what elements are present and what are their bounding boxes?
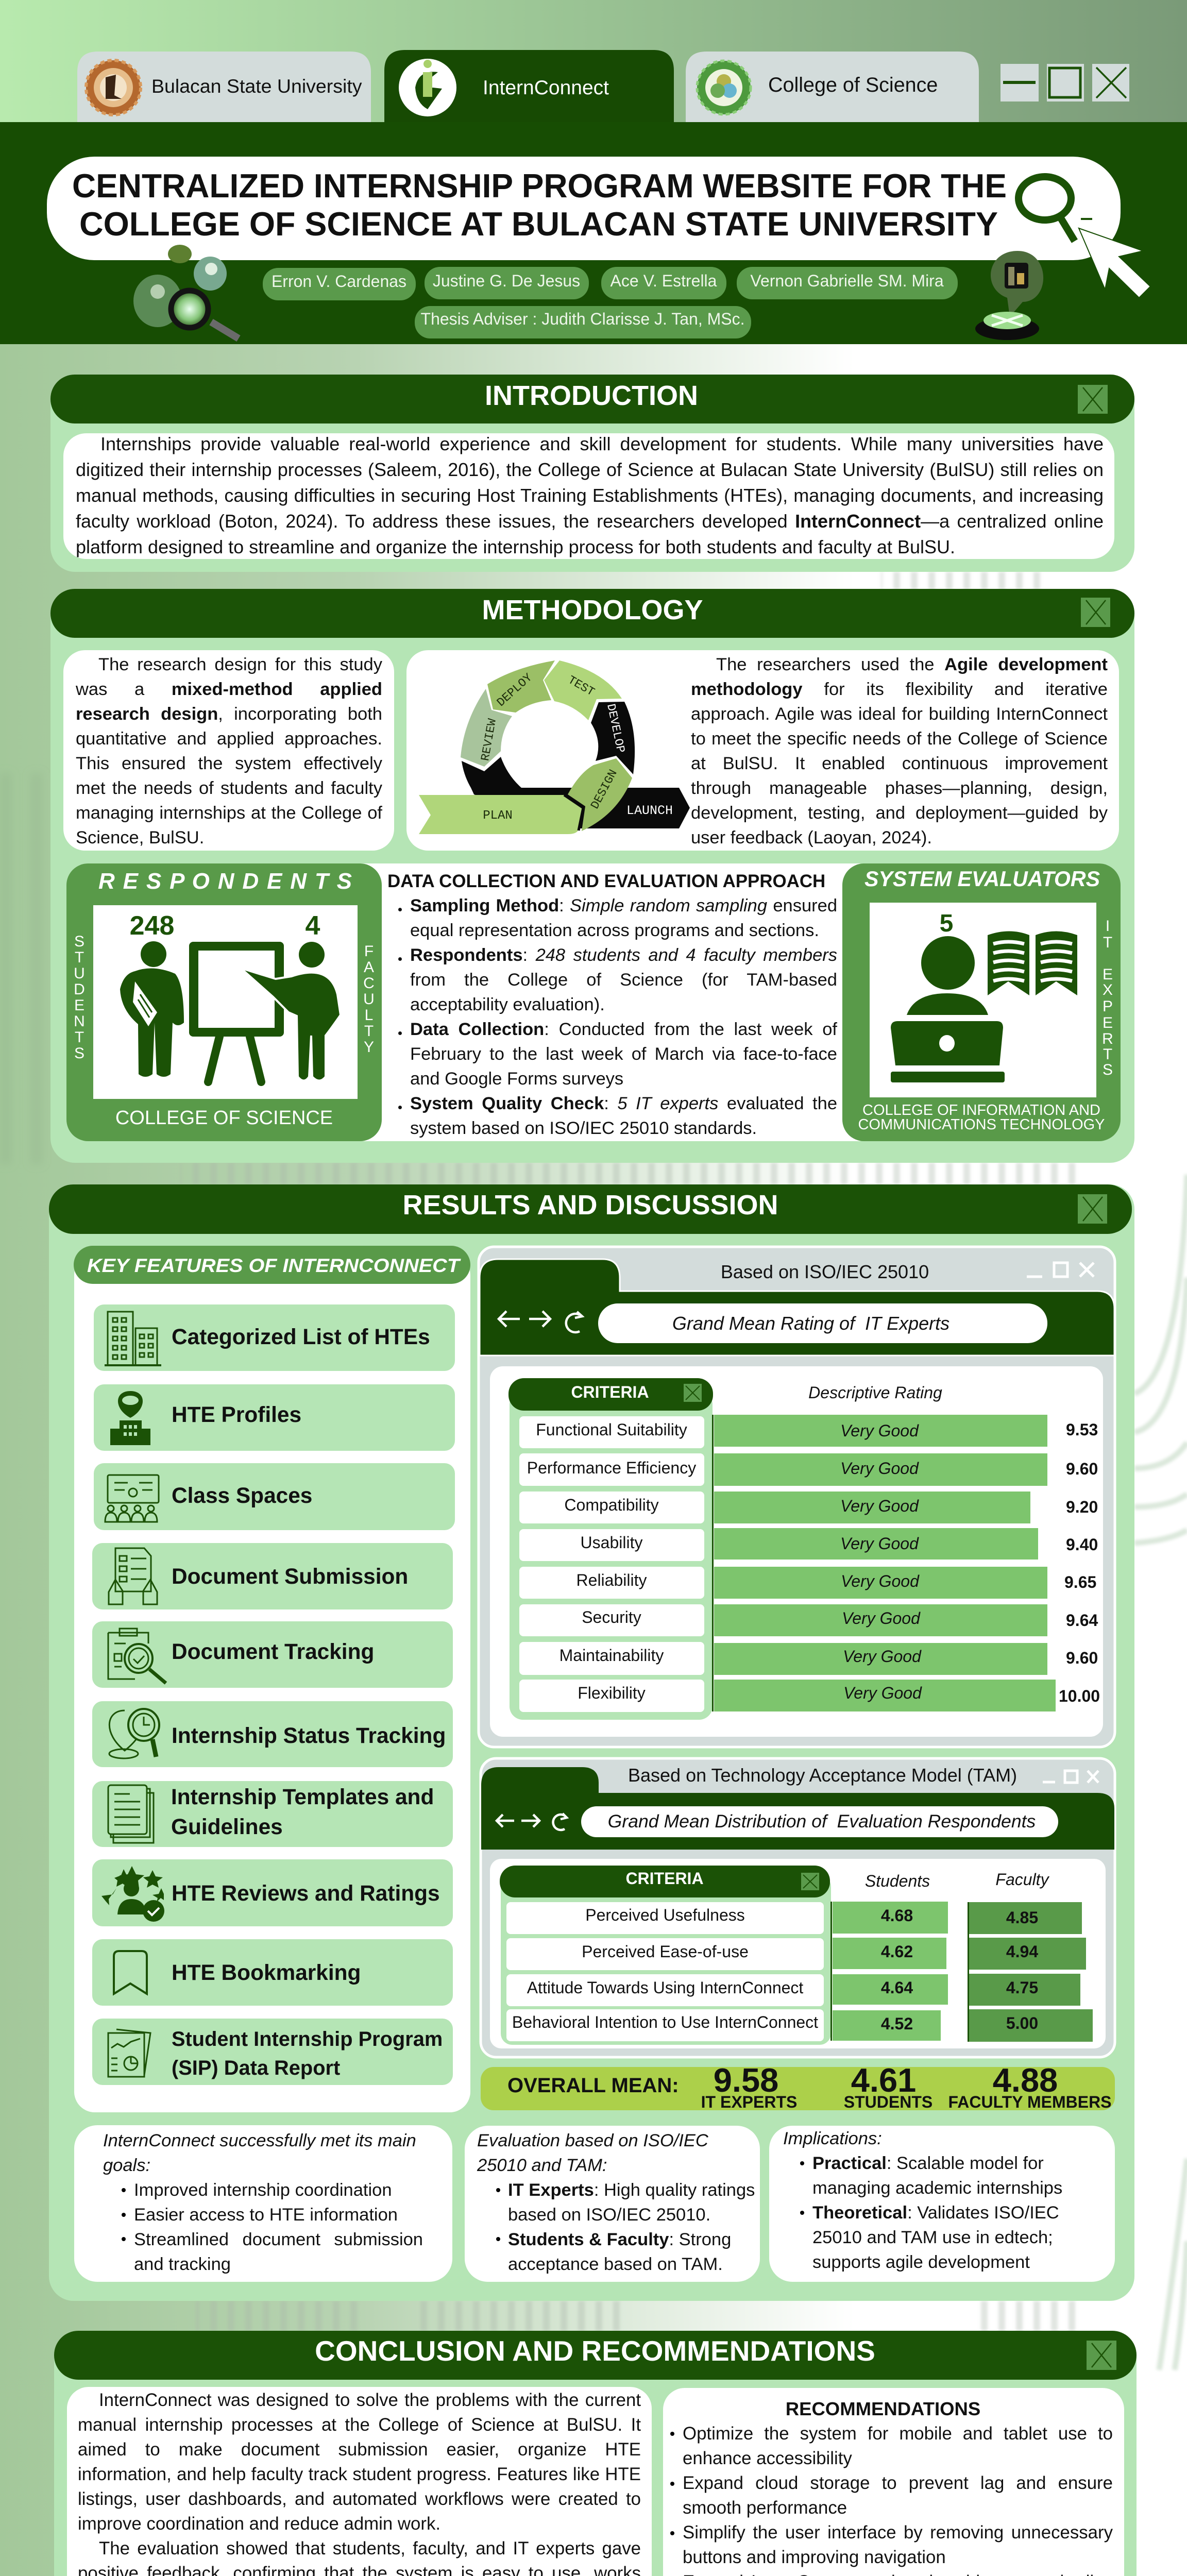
address bar <box>598 1303 1047 1343</box>
author names: Ace V. Estrella <box>611 272 717 290</box>
panel: key features: HTE Reviews and Ratings <box>172 1881 440 1905</box>
label: IT EXPERTS vertical: E <box>1103 1014 1113 1031</box>
bar chart: ratings: 9.60 <box>1066 1460 1098 1478</box>
panel: key features: HTE Bookmarking <box>172 1960 361 1985</box>
label: FACULTY vertical: L <box>365 1007 373 1024</box>
panel: system evaluators <box>842 863 1121 1141</box>
panel: results and discussion <box>49 1184 1134 2301</box>
browser tab: InternConnect <box>384 50 674 122</box>
criteria column: Usability <box>581 1533 642 1552</box>
bar chart: ratings: 9.40 <box>1066 1535 1098 1554</box>
criteria column: Behavioral Intention to Use InternConnect <box>512 2013 818 2031</box>
panel: introduction <box>50 375 1134 572</box>
browser window: ISO/IEC 25010 chart: Grand Mean Rating of IT Experts <box>672 1313 949 1334</box>
bar chart: ratings: 9.60 <box>1066 1649 1098 1667</box>
title banner <box>47 157 1121 260</box>
heading: introduction: INTRODUCTION <box>485 380 698 411</box>
text block: implications <box>783 2129 1062 2272</box>
overall mean strip: 9.58 <box>714 2061 778 2099</box>
overall mean strip: 4.88 <box>993 2061 1058 2099</box>
title banner: CENTRALIZED INTERNSHIP PROGRAM WEBSITE FOR THE <box>72 167 1007 205</box>
label: FACULTY vertical: A <box>364 959 374 976</box>
author names: Vernon Gabrielle SM. Mira <box>750 272 944 290</box>
panel: key features: (SIP) Data Report <box>172 2057 340 2079</box>
header band <box>0 122 1187 344</box>
bar chart: ratings: 10.00 <box>1059 1687 1100 1705</box>
criteria column: Security <box>582 1608 641 1626</box>
panel: system evaluators: 5 <box>940 910 953 937</box>
criteria column: Performance Efficiency <box>527 1459 696 1477</box>
bar chart: ratings: 9.64 <box>1066 1611 1098 1630</box>
text block: data collection bullets: System Quality Check: 5 IT experts evaluated the <box>410 1094 837 1113</box>
icon: class space <box>105 1475 159 1522</box>
bar chart: ratings <box>712 1415 1100 1711</box>
icon: expert at laptop <box>891 936 1005 1082</box>
bar chart: ratings: Very Good <box>842 1609 921 1628</box>
address bar <box>581 1806 1058 1837</box>
label: IT EXPERTS vertical: I <box>1106 918 1110 935</box>
text block: implications: supports agile development <box>812 2252 1030 2272</box>
criteria column: Perceived Usefulness <box>585 1906 745 1924</box>
heading: data collection: DATA COLLECTION AND EVALUATION APPROACH <box>387 871 825 891</box>
label: IT EXPERTS vertical: T <box>1103 1046 1112 1063</box>
panel: key features: KEY FEATURES OF INTERNCONNECT <box>87 1255 462 1276</box>
bar chart: ratings: Very Good <box>843 1684 922 1702</box>
text block: conclusion: manual internship processes at the College of Science at BulSU. It <box>78 2415 641 2435</box>
text block: data collection bullets: and Google Forms surveys <box>410 1069 623 1089</box>
text block: agile methodology: through manageable phases—planning, design, <box>691 778 1108 798</box>
window controls <box>1043 1771 1098 1783</box>
panel: key features: Internship Status Tracking <box>172 1723 446 1748</box>
bar chart: faculty: 4.75 <box>1006 1978 1038 1997</box>
criteria column: Attitude Towards Using InternConnect <box>527 1978 803 1997</box>
icon: navigation arrows <box>499 1311 582 1332</box>
bar chart: students <box>830 1872 948 2041</box>
icon: magnifier and cursor <box>1019 177 1150 298</box>
icon: templates <box>108 1785 154 1843</box>
text block: agile methodology: to meet the specific needs of the College of Science <box>691 729 1108 749</box>
panel: evaluation card <box>465 2126 760 2282</box>
overall mean strip: OVERALL MEAN: <box>507 2074 679 2097</box>
panel: key features: Student Internship Program <box>172 2028 443 2050</box>
text block: conclusion: InternConnect was designed to solve the problems with the current <box>99 2390 641 2410</box>
text block: research design: was a mixed-method applied <box>76 680 382 699</box>
text block: goals: goals: <box>103 2156 150 2175</box>
criteria column <box>500 1866 831 2045</box>
agile development cycle diagram: REVIEW <box>479 718 499 762</box>
text block: research design: Science, BulSU. <box>76 828 204 848</box>
text block: implications: 25010 and TAM use in edtech; <box>812 2228 1053 2247</box>
browser tab: Bulacan State University <box>77 52 371 122</box>
text block: data collection bullets: Respondents: 248 students and 4 faculty members <box>410 945 837 965</box>
overall mean strip: STUDENTS <box>844 2093 932 2111</box>
bar chart: students: 4.62 <box>881 1942 913 1961</box>
text block: conclusion <box>78 2390 641 2576</box>
text block: introduction <box>76 433 1104 557</box>
text block: goals: Streamlined document submission <box>134 2230 423 2249</box>
title banner: COLLEGE OF SCIENCE AT BULACAN STATE UNIVERSITY <box>79 205 998 243</box>
label: STUDENTS vertical: T <box>75 1029 84 1046</box>
text block: data collection bullets: Sampling Method: Simple random sampling ensured <box>410 896 837 916</box>
icon: college seal <box>697 61 751 114</box>
text block: goals: Easier access to HTE information <box>134 2205 398 2225</box>
text block: conclusion: listings, user dashboards, and automated workflows were created to <box>78 2489 641 2509</box>
browser window: TAM chart <box>481 1758 1115 2057</box>
icon: location building <box>110 1391 150 1445</box>
text block: research design: managing internships at the College of <box>76 803 382 823</box>
text block: recommendations: buttons and improving navigation <box>683 2547 946 2567</box>
bar chart: faculty: Faculty <box>995 1870 1050 1889</box>
bar chart: ratings: Very Good <box>843 1647 922 1666</box>
text block: conclusion: aimed to make document submission easier, organize HTE <box>78 2439 641 2460</box>
text block: introduction: platform designed to streamline and organize the internship process for both students and faculty at BulSU. <box>76 536 955 557</box>
text block: agile methodology: at BulSU. It enabled continuous improvement <box>691 754 1108 773</box>
bar chart: faculty <box>968 1870 1093 2042</box>
panel: key features: HTE Profiles <box>172 1402 301 1427</box>
bar chart: faculty: 4.94 <box>1006 1942 1038 1961</box>
text block: introduction: Internships provide valuable real-world experience and skill development for students. While many universities have <box>100 433 1104 454</box>
label: IT EXPERTS vertical: S <box>1103 1061 1113 1078</box>
text block: research design: This ensured the system effectively <box>76 754 382 773</box>
panel: respondents: 248 <box>130 911 174 941</box>
text block: agile methodology: methodology for its flexibility and iterative <box>691 680 1108 699</box>
icon: buildings <box>105 1312 161 1365</box>
text block: recommendations: Optimize the system for mobile and tablet use to <box>683 2424 1113 2444</box>
text block: recommendations <box>683 2424 1113 2576</box>
icon: reviews and ratings <box>101 1866 164 1922</box>
icon: chat bubble document <box>975 251 1043 340</box>
text block: evaluation: based on ISO/IEC 25010. <box>508 2205 710 2225</box>
bar chart: students: 4.64 <box>881 1978 913 1997</box>
label: STUDENTS vertical: U <box>74 965 85 982</box>
text block: recommendations: Expand cloud storage to prevent lag and ensure <box>683 2473 1113 2493</box>
bar chart: faculty: 4.85 <box>1006 1908 1038 1927</box>
agile development cycle diagram: DESIGN <box>588 768 620 811</box>
icon: bookmark <box>114 1951 147 1994</box>
overall mean strip: FACULTY MEMBERS <box>948 2093 1112 2111</box>
text block: goals: InternConnect successfully met its main <box>103 2131 416 2150</box>
panel: key features: Class Spaces <box>172 1483 312 1507</box>
text block: agile methodology: development, testing, and deployment—guided by <box>691 803 1108 823</box>
text block: implications: Theoretical: Validates ISO/IEC <box>812 2203 1059 2223</box>
text block: data collection bullets: system based on ISO/IEC 25010 standards. <box>410 1118 757 1138</box>
panel: respondents: R E S P O N D E N T S <box>98 869 352 894</box>
text block: evaluation <box>477 2131 755 2274</box>
agile development cycle diagram: DEVELOP <box>604 703 628 754</box>
panel: goals card <box>74 2125 452 2282</box>
bar chart: ratings: Very Good <box>840 1459 919 1478</box>
text block: evaluation: IT Experts: High quality ratings <box>508 2180 755 2200</box>
text block: introduction: digitized their internship processes (Saleem, 2016), the College of Science at Bulacan State University (BulSU) still relies on <box>76 459 1104 480</box>
label: STUDENTS vertical: N <box>74 1013 85 1030</box>
panel: implications card <box>769 2126 1115 2282</box>
heading: methodology: METHODOLOGY <box>482 595 703 625</box>
panel: methodology <box>50 589 1134 1163</box>
text block: research design: The research design for this study <box>98 655 382 674</box>
bar chart: ratings: Very Good <box>840 1534 919 1553</box>
heading: introduction <box>50 375 1134 423</box>
text block: agile methodology: approach. Agile was ideal for building InternConnect <box>691 704 1108 724</box>
author names: Thesis Adviser : Judith Clarisse J. Tan, MSc. <box>421 310 744 328</box>
text block: recommendations: enhance accessibility <box>683 2448 852 2468</box>
text block: agile methodology: The researchers used the Agile development <box>716 655 1108 674</box>
criteria column: Flexibility <box>578 1684 646 1702</box>
browser tab: InternConnect: InternConnect <box>483 77 609 99</box>
text block: implications: Practical: Scalable model for <box>812 2154 1044 2173</box>
text block: recommendations: smooth performance <box>683 2498 847 2518</box>
text block: conclusion: The evaluation showed that students, faculty, and IT experts gave <box>99 2538 641 2558</box>
agile development cycle diagram <box>419 660 690 834</box>
agile development cycle diagram: PLAN <box>483 809 513 823</box>
text block: data collection bullets <box>398 896 837 1138</box>
overall mean strip: 4.61 <box>851 2061 916 2099</box>
panel: respondents <box>66 863 382 1141</box>
text block: introduction: manual methods, causing difficulties in securing Host Training Establishments (HTEs), managing documents, and increasing <box>76 485 1104 506</box>
text block: recommendations: Simplify the user interface by removing unnecessary <box>683 2522 1113 2543</box>
text block: goals <box>103 2131 423 2274</box>
icon: document tracking <box>108 1629 166 1683</box>
text block: research design: research design, incorporating both <box>76 704 382 724</box>
text block: research design <box>76 655 382 848</box>
bar chart: ratings: Very Good <box>840 1497 919 1515</box>
overall mean strip <box>481 2061 1115 2111</box>
bar chart: students: 4.52 <box>881 2014 913 2033</box>
text block: evaluation: 25010 and TAM: <box>477 2156 607 2175</box>
text block: implications: managing academic internships <box>812 2178 1062 2198</box>
panel: system evaluators: SYSTEM EVALUATORS <box>864 867 1100 891</box>
label: STUDENTS vertical: E <box>74 997 84 1014</box>
bar chart: students: Students <box>865 1872 930 1890</box>
criteria column: CRITERIA <box>625 1869 704 1888</box>
text block: agile methodology: user feedback (Laoyan, 2024). <box>691 828 932 848</box>
agile development cycle diagram: LAUNCH <box>626 803 673 818</box>
text block: evaluation: Evaluation based on ISO/IEC <box>477 2131 708 2150</box>
label: FACULTY vertical: C <box>363 975 375 992</box>
agile development cycle diagram: DEPLOY <box>495 671 535 709</box>
panel: system evaluators: COLLEGE OF INFORMATION AND <box>862 1102 1100 1118</box>
panel: conclusion and recommendations: RECOMMENDATIONS <box>786 2398 980 2419</box>
label: IT EXPERTS vertical: P <box>1103 998 1113 1015</box>
text block: data collection bullets: Data Collection: Conducted from the last week of <box>410 1020 837 1039</box>
criteria column: Functional Suitability <box>536 1420 687 1439</box>
bar chart: ratings: 9.20 <box>1066 1498 1098 1516</box>
text block: research design: quantitative and applied approaches. <box>76 729 382 749</box>
bar chart: ratings: 9.65 <box>1064 1573 1096 1591</box>
author names <box>263 267 958 338</box>
panel: key features: Guidelines <box>171 1815 283 1839</box>
browser window: ISO/IEC 25010 chart: Descriptive Rating <box>808 1383 942 1402</box>
label: FACULTY vertical: F <box>364 943 374 960</box>
data collection backing <box>361 863 860 1141</box>
label: IT EXPERTS vertical: X <box>1103 981 1113 998</box>
panel: conclusion and recommendations <box>54 2331 1137 2576</box>
icon: presentation board <box>189 942 284 1082</box>
icon: university seal <box>86 60 141 115</box>
icon: navigation arrows <box>497 1814 567 1830</box>
bar chart: faculty: 5.00 <box>1006 2014 1038 2032</box>
icon: InternConnect logo <box>399 59 456 116</box>
window controls <box>1027 1263 1094 1277</box>
overall mean strip: IT EXPERTS <box>701 2093 797 2111</box>
text block: evaluation: Students & Faculty: Strong <box>508 2230 731 2249</box>
label: STUDENTS vertical: S <box>74 1045 84 1062</box>
label: FACULTY vertical: Y <box>364 1039 374 1056</box>
browser window: ISO/IEC 25010 chart: Based on ISO/IEC 25010 <box>721 1261 929 1282</box>
window controls <box>1001 64 1129 101</box>
heading: conclusion <box>54 2331 1137 2380</box>
label: IT EXPERTS vertical: T <box>1103 934 1112 951</box>
label: IT EXPERTS vertical: E <box>1103 966 1113 983</box>
icon: student figure <box>120 941 184 1077</box>
text block: research design: met the needs of students and faculty <box>76 778 382 798</box>
text block: introduction: faculty workload (Boton, 2024). To address these issues, the researchers developed InternConnect—a centralized online <box>76 511 1104 532</box>
text block: conclusion: information, and help faculty track student progress. Features like HTE <box>78 2464 641 2484</box>
browser window: TAM chart: Grand Mean Distribution of Evaluation Respondents <box>608 1811 1036 1832</box>
icon: faculty figure <box>241 942 341 1081</box>
text block: data collection bullets: February to the last week of March via face-to-face <box>410 1044 837 1064</box>
browser window: TAM chart: Based on Technology Acceptance Model (TAM) <box>628 1765 1017 1786</box>
text block: implications: Implications: <box>783 2129 882 2148</box>
label: STUDENTS vertical: S <box>74 933 84 950</box>
agile development cycle diagram: TEST <box>566 673 597 699</box>
icon: internship status <box>109 1709 159 1758</box>
panel: respondents: 4 <box>306 911 320 941</box>
bar chart: students: 4.68 <box>881 1906 913 1925</box>
panel: key features: Categorized List of HTEs <box>172 1325 430 1349</box>
text block: evaluation: acceptance based on TAM. <box>508 2255 723 2274</box>
icon: open book <box>988 931 1077 995</box>
heading: results and discussion <box>49 1184 1132 1234</box>
panel: respondents: COLLEGE OF SCIENCE <box>115 1107 333 1129</box>
panel: key features: Internship Templates and <box>171 1785 434 1809</box>
label: FACULTY vertical: U <box>363 991 375 1008</box>
text block: data collection bullets: equal representation across programs and sections. <box>410 921 819 940</box>
bar chart: ratings: 9.53 <box>1066 1420 1098 1439</box>
text block: agile methodology <box>691 655 1108 848</box>
panel: key features: Document Submission <box>172 1564 408 1588</box>
author names: Erron V. Cardenas <box>272 272 406 291</box>
panel: system evaluators: COMMUNICATIONS TECHNOLOGY <box>858 1116 1105 1133</box>
label: STUDENTS vertical: D <box>74 981 85 998</box>
bar chart: ratings: Very Good <box>841 1572 920 1590</box>
text block: goals: Improved internship coordination <box>134 2180 392 2200</box>
criteria column <box>508 1378 713 1720</box>
criteria column: Reliability <box>576 1571 647 1589</box>
browser tab: College of Science <box>686 52 979 122</box>
panel: key features <box>74 1246 470 2112</box>
browser tab: College of Science: College of Science <box>768 74 938 96</box>
icon: document submission <box>109 1548 157 1604</box>
label: FACULTY vertical: T <box>364 1023 374 1040</box>
criteria column: CRITERIA <box>571 1383 649 1401</box>
icon: data report <box>108 2029 150 2077</box>
browser window: ISO/IEC 25010 chart <box>479 1247 1115 1747</box>
text block: conclusion: improve coordination and reduce admin work. <box>78 2514 440 2534</box>
browser tab: Bulacan State University: Bulacan State University <box>151 75 362 97</box>
author names: Justine G. De Jesus <box>433 272 580 290</box>
bar chart: ratings: Very Good <box>840 1421 919 1440</box>
heading: methodology <box>50 589 1134 638</box>
criteria column: Maintainability <box>559 1646 664 1665</box>
text block: data collection bullets: from the College of Science (for TAM-based <box>410 970 837 990</box>
criteria column: Perceived Ease-of-use <box>582 1942 749 1961</box>
icon: people search <box>133 245 239 338</box>
label: STUDENTS vertical: T <box>75 949 84 966</box>
text block: data collection bullets: acceptability evaluation). <box>410 995 605 1014</box>
heading: conclusion: CONCLUSION AND RECOMMENDATIONS <box>315 2335 875 2367</box>
criteria column: Compatibility <box>564 1496 659 1514</box>
panel: key features: Document Tracking <box>172 1639 374 1664</box>
label: IT EXPERTS vertical: R <box>1102 1030 1113 1047</box>
text block: goals: and tracking <box>134 2255 231 2274</box>
heading: results and discussion: RESULTS AND DISCUSSION <box>402 1190 778 1221</box>
